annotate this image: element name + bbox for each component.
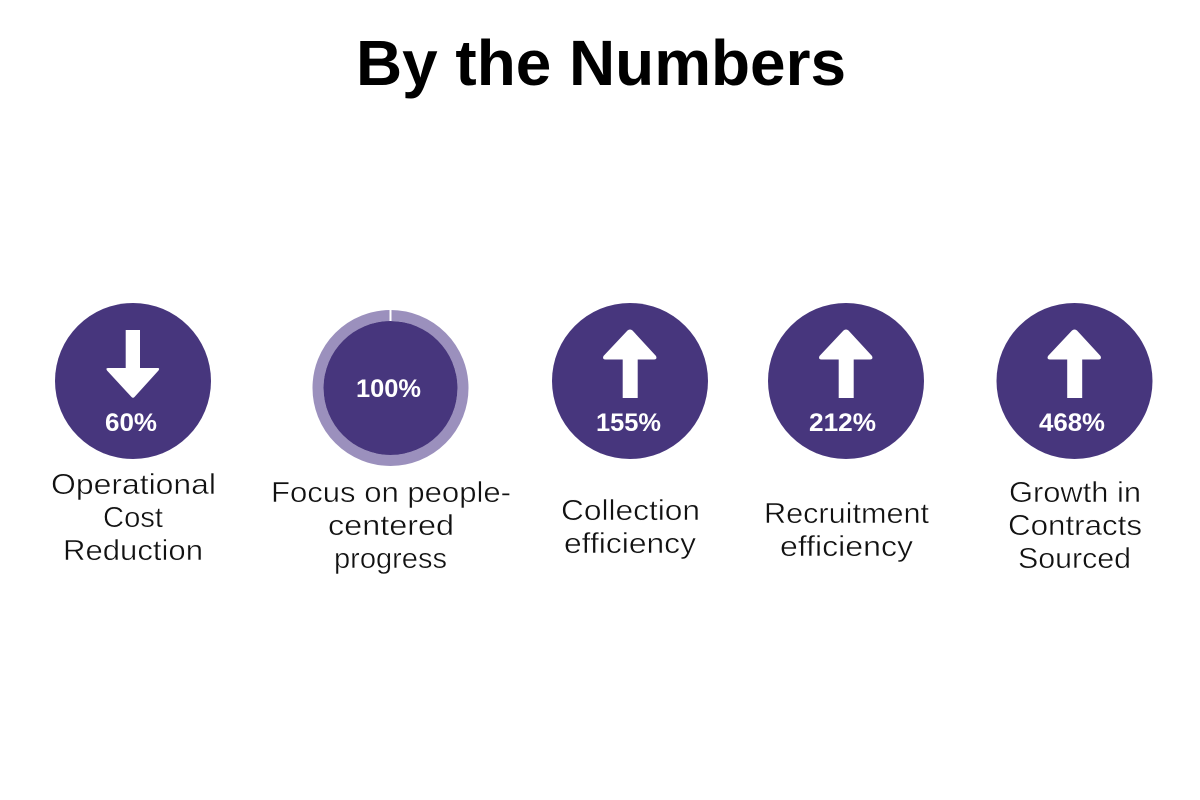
label: recruitment efficiency: efficiency xyxy=(780,531,914,563)
stat: 60%: 60% xyxy=(105,409,157,437)
label: operational cost reduction: Operational xyxy=(51,469,216,501)
label: recruitment efficiency xyxy=(764,498,929,563)
label: recruitment efficiency: Recruitment xyxy=(764,498,929,530)
label: operational cost reduction xyxy=(51,469,216,567)
panel: growth in contracts sourced xyxy=(996,303,1152,575)
label: focus on people-centered progress xyxy=(271,477,511,575)
label: collection efficiency xyxy=(561,495,700,560)
stat: 468%: 468% xyxy=(1039,409,1105,437)
panel: operational cost reduction xyxy=(51,303,216,567)
title: By the Numbers xyxy=(356,27,846,99)
label: collection efficiency: Collection xyxy=(561,495,700,527)
label: growth in contracts sourced: Growth in xyxy=(1009,477,1141,509)
label: operational cost reduction: Reduction xyxy=(63,535,203,567)
icon: circle with up arrow xyxy=(768,303,924,459)
label: focus on people-centered progress: Focus on people- xyxy=(271,477,511,509)
panel: recruitment efficiency xyxy=(764,303,929,563)
icon: progress ring xyxy=(318,310,463,460)
panel: people-centered progress xyxy=(271,310,511,575)
icon: circle with down arrow xyxy=(55,303,211,459)
label: focus on people-centered progress: centered xyxy=(328,510,454,542)
stat: 155%: 155% xyxy=(596,409,661,437)
label: collection efficiency: efficiency xyxy=(564,528,697,560)
label: growth in contracts sourced xyxy=(1008,477,1142,575)
icon: circle with up arrow xyxy=(996,303,1152,459)
label: focus on people-centered progress: progress xyxy=(334,543,447,575)
label: growth in contracts sourced: Sourced xyxy=(1018,543,1131,575)
stat: 100%: 100% xyxy=(356,375,421,403)
icon: circle with up arrow xyxy=(552,303,708,459)
stat: 212%: 212% xyxy=(809,409,876,437)
label: growth in contracts sourced: Contracts xyxy=(1008,510,1142,542)
panel: collection efficiency xyxy=(552,303,708,560)
label: operational cost reduction: Cost xyxy=(103,502,163,534)
